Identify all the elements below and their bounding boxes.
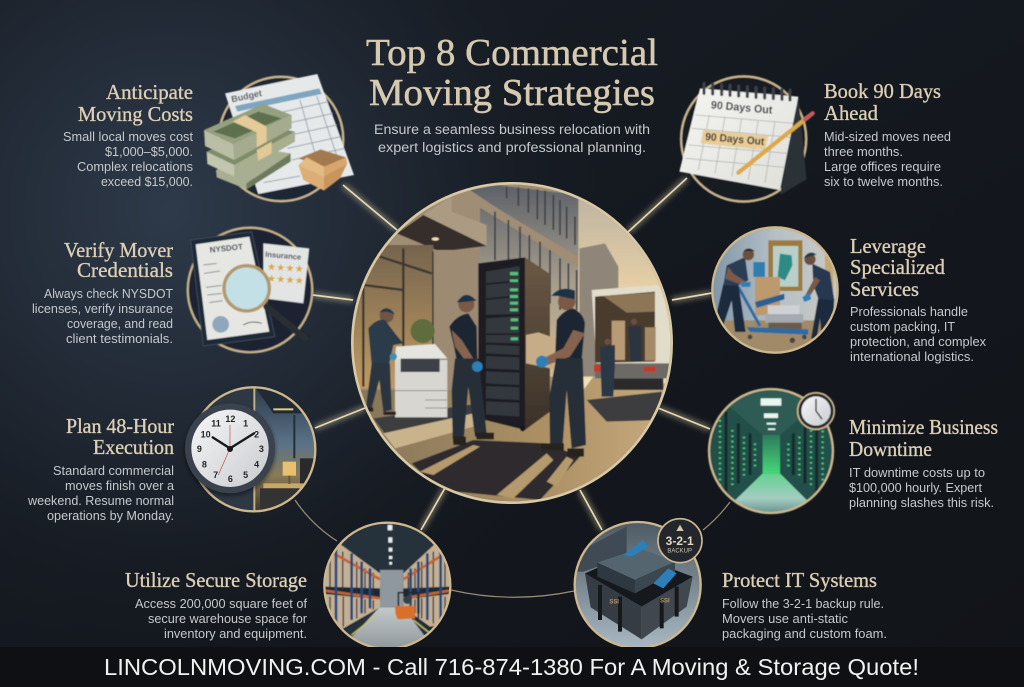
body text: IT downtime costs up to: [849, 466, 985, 480]
heading: Anticipate: [106, 80, 193, 104]
icon: budget sheet, cash and box: [204, 74, 354, 201]
heading: [78, 80, 193, 126]
icon: movers handling art and equipment: [712, 227, 840, 355]
icon: wall clock over night office: 9: [197, 444, 202, 454]
body text: weekend. Resume normal: [27, 494, 174, 508]
glass facade: [470, 185, 578, 377]
heading: Credentials: [77, 258, 173, 282]
panel: book 90 days ahead: [679, 76, 951, 202]
icon: warehouse aisle: [323, 522, 452, 650]
title: Top 8 Commercial: [366, 32, 658, 74]
mover right of rack: [536, 289, 586, 457]
body text: moves finish over a: [65, 479, 174, 493]
body text: packaging and custom foam.: [722, 627, 887, 641]
entrance windows and door: [353, 245, 433, 390]
icon: wall clock over night office: 10: [201, 429, 211, 439]
heading: Ahead: [824, 101, 878, 125]
heading: Moving Costs: [78, 102, 193, 126]
body text: [722, 597, 887, 641]
heading: Verify Mover: [64, 238, 173, 262]
icon: desk calendar and pencil: 90 Days Out: [705, 131, 765, 148]
title: Moving Strategies: [369, 72, 655, 114]
lowest stack: [216, 148, 291, 189]
plant: [411, 319, 435, 343]
heading: Book 90 Days: [824, 79, 941, 103]
icon: protective case with 3-2-1 badge: SSI: [660, 599, 670, 605]
left mover: [717, 284, 746, 332]
body text: [27, 464, 174, 523]
icon: wall clock over night office: 1: [243, 419, 248, 429]
body text: protection, and complex: [850, 335, 987, 349]
body text: Professionals handle: [850, 305, 968, 319]
icon: wall clock over night office: 8: [202, 459, 207, 469]
icon: wall clock over night office: 5: [243, 470, 248, 480]
body text: secure warehouse space for: [148, 612, 307, 626]
body text: Complex relocations: [77, 160, 193, 174]
worker by copier: [366, 308, 403, 415]
body text: $1,000–$5,000.: [105, 145, 193, 159]
body text: Mid-sized moves need: [824, 130, 951, 144]
middle stack: [207, 125, 295, 165]
panel: protect IT systems: [574, 519, 887, 649]
top stack: [204, 104, 292, 144]
body text: [63, 130, 194, 189]
body text: planning slashes this risk.: [849, 496, 994, 510]
body text: Follow the 3-2-1 backup rule.: [722, 597, 884, 611]
icon: licence, insurance card and magnifier: Insurance: [265, 250, 302, 262]
icon: wall clock over night office: 7: [213, 470, 218, 480]
mover left of rack: [449, 295, 494, 445]
connector lines: [295, 178, 730, 597]
panel: leverage specialized services: [712, 227, 987, 364]
icon: desk calendar and pencil: [679, 76, 813, 202]
body text: Movers use anti-static: [722, 612, 848, 626]
body text: [135, 597, 307, 641]
icon: data centre aisle with clock badge: [708, 388, 835, 515]
copier: [395, 344, 447, 417]
body text: Always check NYSDOT: [44, 287, 173, 301]
subtitle: Ensure a seamless business relocation with: [374, 122, 650, 137]
body text: Standard commercial: [53, 464, 174, 478]
box: [526, 332, 556, 369]
heading: [64, 238, 173, 282]
icon: wall clock over night office: [185, 387, 317, 515]
heading: Minimize Business: [849, 415, 998, 439]
icon: licence, insurance card and magnifier: [188, 228, 312, 352]
heading: [66, 414, 174, 459]
icon: wall clock over night office: 2: [254, 429, 259, 439]
heading: Execution: [93, 435, 174, 459]
body text: exceed $15,000.: [101, 175, 193, 189]
body text: $100,000 hourly. Expert: [849, 481, 982, 495]
panel: plan 48-hour execution: [27, 387, 317, 523]
icon: desk calendar and pencil: 90 Days Out: [710, 99, 773, 117]
icon: budget sheet, cash and box: Budget: [230, 88, 263, 104]
subtitle: expert logistics and professional planning.: [378, 140, 646, 155]
body text: client testimonials.: [66, 332, 173, 346]
body text: international logistics.: [850, 350, 974, 364]
icon: wall clock over night office: 3: [259, 444, 264, 454]
body text: Access 200,000 square feet of: [135, 597, 307, 611]
icon: licence, insurance card and magnifier: ★★★★: [266, 261, 304, 276]
banner: [0, 647, 1024, 687]
icon: protective case with 3-2-1 badge: 3-2-1: [666, 534, 694, 548]
heading: [824, 79, 941, 125]
central photo: movers with server rack: [350, 180, 678, 507]
distant building: [579, 243, 618, 377]
moving truck: [592, 285, 672, 397]
icon: wall clock over night office: 4: [254, 459, 259, 469]
icon: wall clock over night office: 11: [211, 419, 221, 429]
body text: custom packing, IT: [850, 320, 955, 334]
canopy: [423, 196, 487, 246]
title: [366, 32, 658, 114]
body text: three months.: [824, 145, 903, 159]
heading: Utilize Secure Storage: [125, 568, 307, 592]
sky: [578, 199, 661, 390]
heading: Downtime: [849, 437, 932, 461]
panel: minimize business downtime: [708, 388, 998, 515]
heading: Specialized: [850, 255, 945, 279]
heading: Plan 48-Hour: [66, 414, 174, 438]
icon: protective case with 3-2-1 badge: SSI: [609, 599, 619, 605]
monitor, box and equipment: [753, 262, 765, 277]
main ring: [352, 183, 672, 503]
heading: Leverage: [850, 234, 926, 258]
right mover: [811, 297, 834, 339]
body text: [824, 130, 951, 189]
body text: operations by Monday.: [47, 509, 174, 523]
icon: protective case with 3-2-1 badge: [574, 519, 702, 649]
body text: Large offices require: [824, 160, 941, 174]
heading: [850, 234, 945, 301]
long shadows: [412, 440, 580, 500]
right racks: [403, 572, 449, 630]
pillar: [433, 249, 452, 344]
icon: wall clock over night office: 12: [225, 414, 235, 424]
painting: [768, 240, 802, 291]
forklift: [395, 606, 415, 619]
icon: licence, insurance card and magnifier: NYSDOT: [209, 242, 243, 255]
panel: verify mover credentials: [32, 228, 312, 352]
cardboard box: [298, 149, 346, 167]
body text: [849, 466, 994, 510]
body text: coverage, and read: [67, 317, 173, 331]
server rack: [478, 257, 550, 431]
icon: protective case with 3-2-1 badge: BACKUP: [667, 549, 692, 555]
body text: licenses, verify insurance: [32, 302, 173, 316]
panel: utilize secure storage: [125, 522, 452, 650]
building wall: [354, 184, 579, 391]
heading: [849, 415, 998, 461]
body text: six to twelve months.: [824, 175, 943, 189]
icon: licence, insurance card and magnifier: ★★★★: [266, 273, 304, 287]
subtitle: [374, 122, 650, 155]
panel: anticipate moving costs: [63, 74, 354, 201]
ground: [353, 377, 677, 507]
banner text: LINCOLNMOVING.COM - Call 716-874-1380 For A Moving & Storage Quote!: [104, 654, 919, 680]
body text: inventory and equipment.: [164, 627, 307, 641]
body text: Small local moves cost: [63, 130, 194, 144]
body text: [32, 287, 173, 346]
heading: Services: [850, 277, 919, 301]
heading: Protect IT Systems: [722, 568, 877, 592]
left racks: [326, 570, 380, 630]
body text: [850, 305, 987, 364]
icon: wall clock over night office: 6: [228, 474, 233, 484]
